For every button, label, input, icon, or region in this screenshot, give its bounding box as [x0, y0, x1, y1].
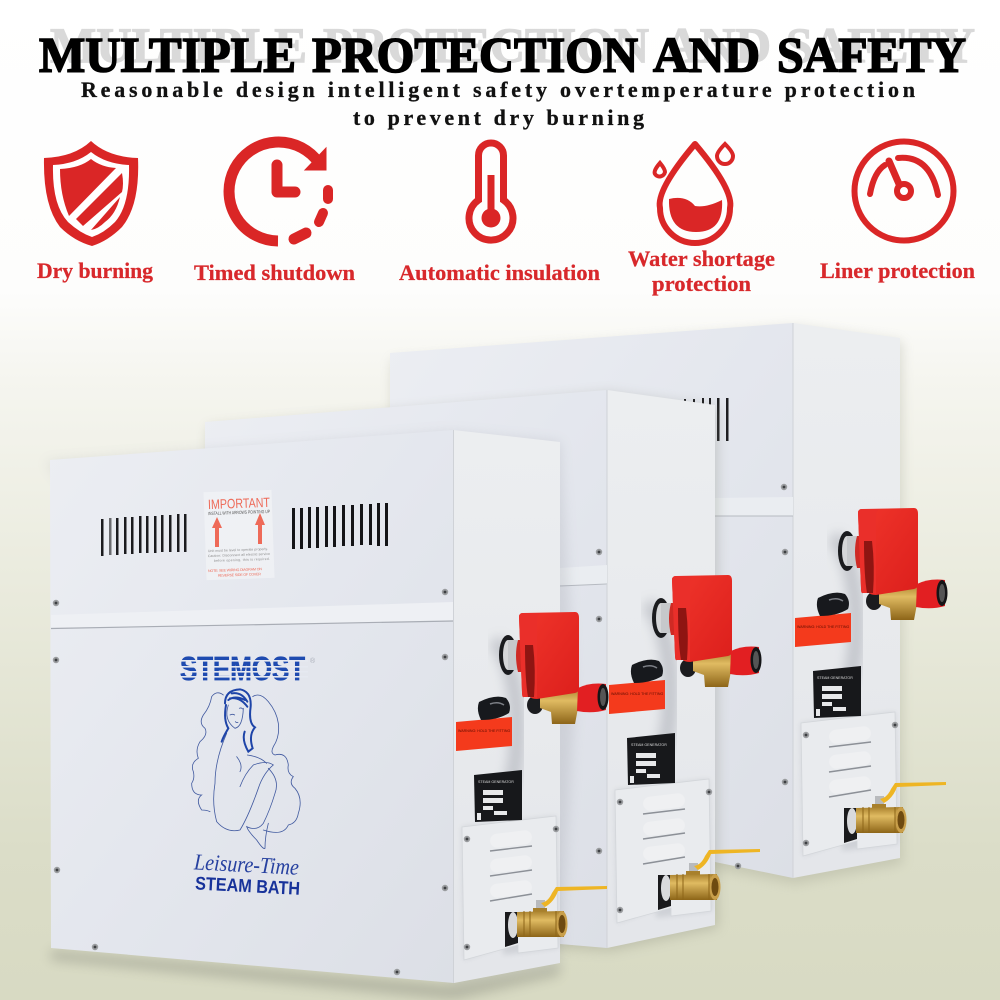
title shadow — [50, 17, 975, 73]
title: AND — [653, 26, 760, 82]
label: protection: protection — [652, 271, 751, 296]
fixtures: middle unit: WARNING: HOLD THE FITTING — [611, 692, 664, 696]
title — [39, 26, 966, 82]
icon: thermometer — [469, 143, 513, 240]
icon labels — [37, 246, 975, 296]
title shadow: AND — [664, 17, 771, 73]
icon: timed clock — [229, 142, 328, 241]
brand logo: ® — [310, 657, 316, 665]
title: MULTIPLE — [39, 26, 296, 82]
fixtures: rear unit: STEAM GENERATOR — [817, 676, 853, 680]
product: front steam generator — [46, 430, 608, 1000]
right vent slots — [292, 503, 388, 549]
fixtures: rear unit: WARNING: HOLD THE FITTING — [797, 625, 850, 629]
front panel seam — [51, 602, 453, 628]
fixtures: front unit: STEAM GENERATOR — [478, 780, 514, 784]
fixtures: front unit: WARNING: HOLD THE FITTING — [458, 729, 511, 733]
subtitle — [81, 77, 915, 130]
important sticker: Unit must be level to operate properly. — [208, 547, 268, 553]
important sticker: INSTALL WITH ARROWS POINTING UP — [208, 509, 270, 516]
brand logo: STEMOST — [180, 650, 305, 687]
title shadow: SAFETY — [786, 17, 975, 73]
product: middle steam generator — [205, 390, 762, 951]
fixtures: front unit — [456, 612, 608, 960]
subtitle: Reasonable design intelligent safety overtemperature protection — [81, 77, 915, 102]
label: dry burning: Dry burning — [37, 258, 153, 283]
product: rear steam generator — [390, 323, 948, 884]
icon: shield — [44, 141, 138, 246]
important sticker: IMPORTANT — [208, 495, 270, 512]
title shadow: PROTECTION — [323, 17, 649, 73]
important sticker — [203, 490, 275, 580]
brand text: STEAM BATH: STEAM BATH — [195, 872, 301, 899]
title shadow: MULTIPLE — [50, 17, 307, 73]
important sticker: NOTE: SEE WIRING DIAGRAM ON — [208, 567, 262, 573]
illustration: bathing woman line drawing — [192, 689, 300, 849]
label: water shortage: Water shortage — [628, 246, 775, 271]
subtitle: to prevent dry burning — [353, 105, 644, 130]
fixtures: middle unit: STEAM GENERATOR — [631, 743, 667, 747]
label: automatic insulation: Automatic insulation — [399, 260, 600, 285]
important sticker: Caution: Disconnect all electric service — [208, 552, 270, 558]
title: PROTECTION — [312, 26, 638, 82]
left vent slots — [101, 514, 186, 556]
label: timed shutdown: Timed shutdown — [194, 260, 355, 285]
fixtures: rear unit — [795, 508, 948, 856]
title: SAFETY — [777, 26, 966, 82]
icon: water drop — [655, 144, 733, 243]
fixtures: middle unit — [609, 575, 762, 923]
important sticker: REVERSE SIDE OF COVER — [218, 572, 261, 578]
brand script: Leisure-Time: Leisure-Time — [193, 849, 300, 880]
label: liner protection: Liner protection — [820, 258, 975, 283]
important sticker: before opening, this is required. — [214, 557, 270, 563]
icon: gauge — [854, 142, 954, 240]
